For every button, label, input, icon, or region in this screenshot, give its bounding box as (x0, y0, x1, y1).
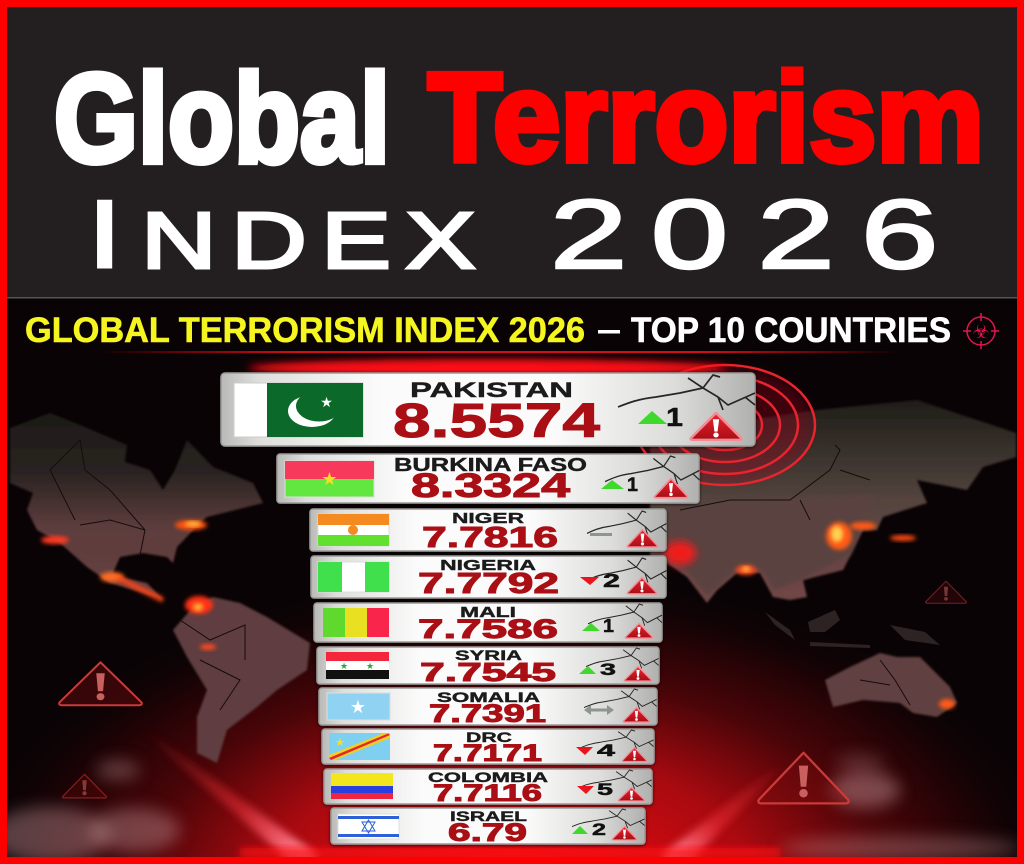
flag: Somalia: ★ (350, 697, 366, 718)
flag: Syria (326, 652, 389, 679)
landmass: Australia (825, 653, 957, 717)
row: Niger: 7.7816 (422, 522, 558, 554)
row: Burkina Faso: 8.3324 (411, 467, 570, 505)
landmass: South America (173, 597, 310, 763)
row: Somalia: SOMALIA (437, 690, 540, 705)
icon: biohazard target (963, 313, 999, 349)
row: Mali (314, 603, 662, 644)
smoke clouds (0, 754, 1020, 863)
flag: Nigeria (318, 562, 389, 592)
subtitle: yellow part: GLOBAL TERRORISM INDEX 2026 (25, 311, 585, 350)
row: Nigeria: NIGERIA (440, 557, 536, 574)
flag: Mali (323, 608, 389, 637)
row: Pakistan: PAKISTAN (410, 379, 573, 402)
row: Israel (331, 808, 645, 847)
subtitle (25, 311, 951, 350)
row: Pakistan (221, 373, 755, 448)
background warning icons (59, 581, 966, 803)
row: Nigeria: 7.7792 (418, 568, 559, 600)
row: Israel: ISRAEL (450, 809, 527, 824)
flag: Somalia (327, 693, 390, 720)
row: Nigeria: 2 (603, 571, 620, 591)
row: DRC (322, 729, 654, 767)
light beams (145, 732, 785, 857)
flag: DRC (329, 733, 390, 760)
flag: Niger (318, 514, 389, 546)
row: Burkina Faso (277, 454, 700, 505)
row: Nigeria (311, 556, 666, 600)
row: DRC: 4 (597, 741, 616, 760)
row: Syria: 3 (600, 660, 616, 679)
flag: Colombia (331, 773, 393, 799)
subtitle rule (100, 351, 900, 353)
row: Burkina Faso: BURKINA FASO (394, 455, 587, 475)
row: Niger (310, 509, 666, 554)
header divider (7, 297, 1017, 298)
title line two: NDEX: NDEX (141, 196, 490, 285)
icon: biohazard target: ☣ (972, 321, 990, 343)
world map (0, 359, 1020, 863)
shock rings (635, 365, 815, 485)
row: Burkina Faso: 1 (627, 475, 638, 496)
bottom red glow (7, 440, 1017, 857)
landmass: North America (10, 413, 263, 600)
row: Mali: 7.7586 (418, 614, 558, 644)
map fractures (50, 440, 910, 710)
landmass: islands of south-east Asia (765, 610, 940, 648)
flag: Syria: ★ (366, 662, 374, 672)
flag: Syria: ★ (340, 662, 348, 672)
title line one: Global: Global (54, 48, 390, 189)
landmass: central Asia fill (668, 495, 875, 596)
row: Israel: 6.79 (448, 819, 527, 847)
row: Colombia: COLOMBIA (428, 770, 548, 785)
ranking list (221, 373, 755, 847)
flag: DRC: ★ (335, 736, 345, 749)
title line two: initial I: I (91, 179, 118, 289)
flag: Burkina Faso: ★ (321, 469, 338, 490)
subtitle: white part: TOP 10 COUNTRIES (631, 311, 951, 350)
row: Somalia: 7.7391 (429, 700, 546, 728)
row: Mali: 1 (603, 616, 614, 636)
title line two: 2026: 2026 (550, 179, 938, 289)
row: Mali: MALI (460, 605, 516, 621)
flag: Israel (338, 814, 399, 839)
row: Pakistan: 8.5574 (393, 395, 600, 448)
glow at bottom edge (240, 848, 780, 857)
title (54, 47, 984, 289)
row: Colombia: 7.7116 (433, 780, 542, 807)
row: Colombia: 5 (597, 780, 613, 799)
row: DRC: 7.7171 (433, 740, 542, 767)
landmass: Eurasia (650, 400, 1016, 603)
row: Syria (317, 647, 659, 687)
row: Niger: NIGER (452, 510, 524, 527)
subtitle: dash (598, 330, 620, 334)
row: Syria: SYRIA (455, 647, 522, 663)
row: DRC: DRC (466, 730, 512, 745)
hot spots (41, 520, 955, 709)
flag: Burkina Faso (285, 461, 374, 497)
row: Somalia (319, 688, 657, 728)
glow behind top rows (248, 359, 728, 377)
row: Colombia (324, 769, 652, 807)
background: dark map panel (0, 298, 1024, 864)
header band (0, 0, 1024, 298)
title line one: Terrorism: Terrorism (428, 47, 984, 188)
row: Syria: 7.7545 (420, 657, 556, 687)
flag: Pakistan (234, 383, 363, 437)
row: Pakistan: 1 (666, 402, 683, 432)
row: Israel: 2 (592, 820, 606, 839)
flag: Pakistan: ★ (320, 395, 333, 411)
